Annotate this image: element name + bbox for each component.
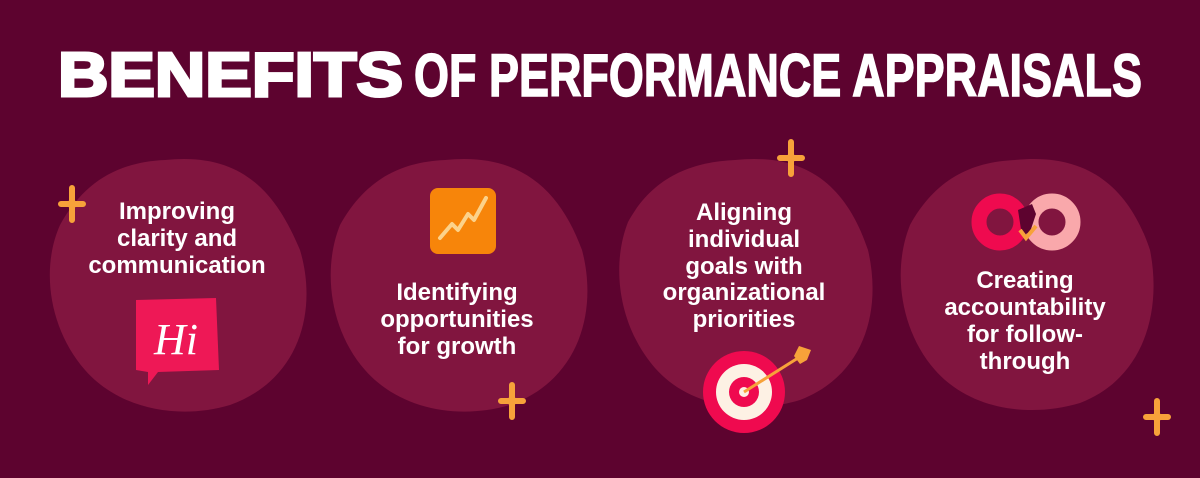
text: creating accountability: accountability xyxy=(944,294,1106,321)
text: improving clarity: communication xyxy=(88,252,266,279)
text: improving clarity: clarity and xyxy=(117,225,237,252)
text: creating accountability: for follow- xyxy=(967,321,1083,348)
panel: clarity and communication xyxy=(50,159,307,412)
text: identifying opportunities: opportunities xyxy=(380,306,534,333)
text: creating accountability: through xyxy=(980,348,1070,375)
panel: growth xyxy=(331,159,587,412)
icon: sparkle 3 xyxy=(780,142,802,174)
icon: infinity loop xyxy=(979,201,1073,243)
icon: sparkle 2 xyxy=(501,385,523,417)
icon: sparkle 4 xyxy=(1146,401,1168,433)
text: aligning goals: Aligning xyxy=(696,199,792,226)
panel: aligning goals xyxy=(619,159,873,433)
text: creating accountability: Creating xyxy=(976,267,1074,294)
text: aligning goals: priorities xyxy=(693,306,795,333)
text: aligning goals: individual xyxy=(688,226,800,253)
text: aligning goals: goals with xyxy=(685,253,803,280)
text: identifying opportunities: Identifying xyxy=(396,279,518,306)
icon: Hi speech bubble xyxy=(136,298,219,385)
title xyxy=(58,41,1142,110)
text: aligning goals: organizational xyxy=(663,279,825,306)
icon: growth chart xyxy=(430,188,496,254)
text: improving clarity: Improving xyxy=(119,198,235,225)
title: BENEFITS xyxy=(58,41,403,110)
icon: Hi speech bubble: Hi xyxy=(153,315,198,364)
panel: accountability xyxy=(901,159,1154,410)
icon: sparkle 1 xyxy=(61,188,83,220)
icon: target xyxy=(703,346,811,433)
text: identifying opportunities: for growth xyxy=(398,333,516,360)
